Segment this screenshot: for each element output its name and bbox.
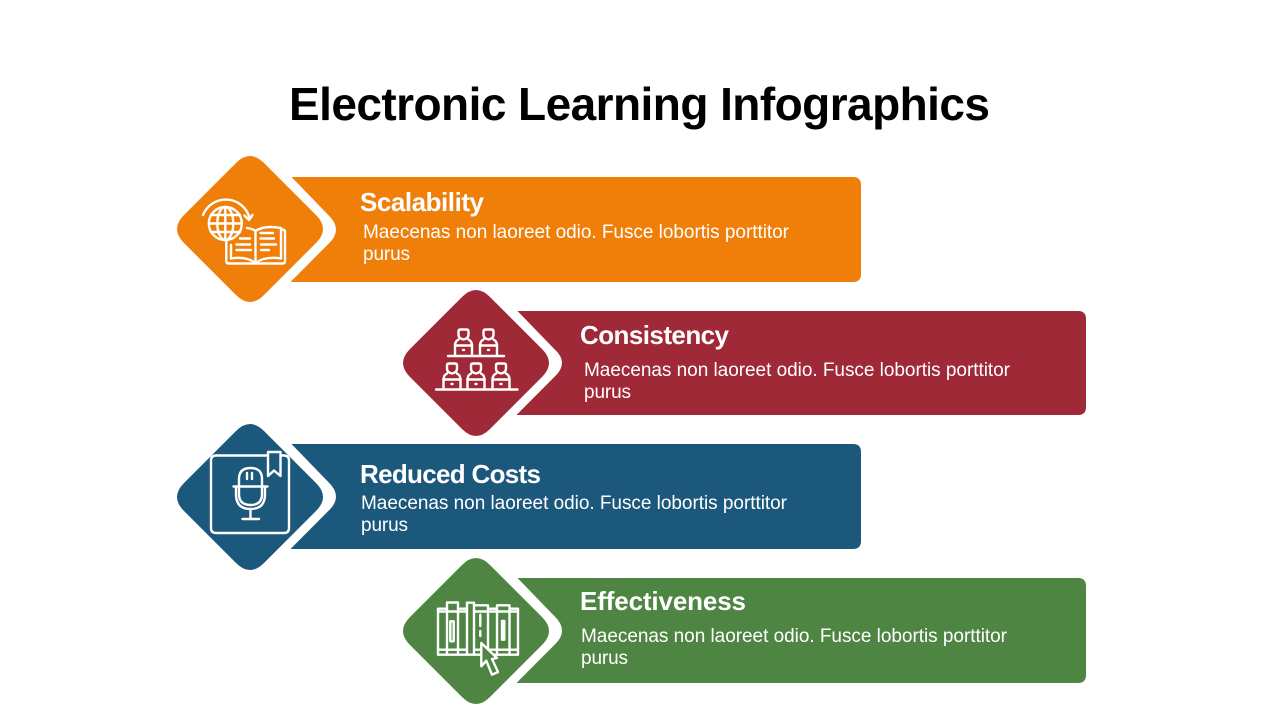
body text: reduced costs: Maecenas non laoreet odio. Fusce lobortis porttitor <box>361 493 788 514</box>
body text: effectiveness: purus <box>581 648 628 669</box>
title: Electronic Learning Infographics <box>289 78 990 130</box>
heading: consistency: Consistency <box>580 320 730 350</box>
panel: consistency <box>403 290 1086 436</box>
heading: scalability: Scalability <box>360 187 485 217</box>
body text: scalability: purus <box>363 244 410 265</box>
diamond: effectiveness <box>403 558 549 704</box>
body text: effectiveness: Maecenas non laoreet odio. Fusce lobortis porttitor <box>581 626 1008 647</box>
panel: reduced costs <box>177 424 861 570</box>
body text: consistency: Maecenas non laoreet odio. Fusce lobortis porttitor <box>584 360 1011 381</box>
icon: books and cursor <box>438 602 518 675</box>
diamond: reduced costs <box>177 424 323 570</box>
icon: globe and open book <box>203 200 285 264</box>
banner: consistency <box>516 311 1086 415</box>
diamond: consistency <box>403 290 549 436</box>
banner: effectiveness <box>516 578 1086 683</box>
body text: reduced costs: purus <box>361 515 408 536</box>
banner: scalability <box>290 177 861 282</box>
banner: reduced costs <box>290 444 861 549</box>
panel: scalability <box>177 156 861 302</box>
panel: effectiveness <box>403 558 1086 704</box>
body text: scalability: Maecenas non laoreet odio. Fusce lobortis porttitor <box>363 222 790 243</box>
body text: consistency: purus <box>584 382 631 403</box>
icon: microphone book <box>211 452 289 533</box>
heading: reduced costs: Reduced Costs <box>360 459 541 489</box>
diamond: scalability <box>177 156 323 302</box>
icon: learners at laptops <box>436 330 518 390</box>
heading: effectiveness: Effectiveness <box>580 586 746 616</box>
